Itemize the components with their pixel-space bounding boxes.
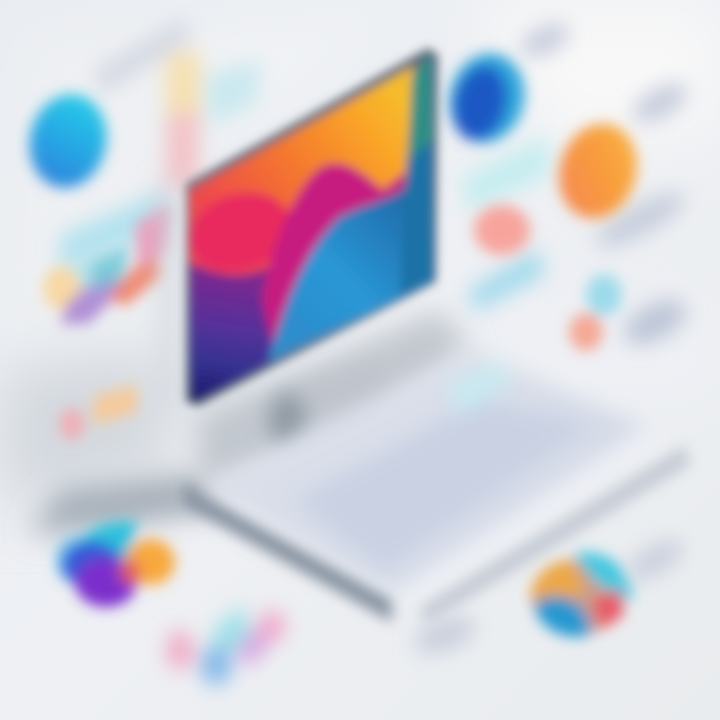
chart: small round icons right [569, 274, 622, 351]
panel: lower right cards [409, 532, 690, 661]
icon: blue circle left [21, 87, 115, 195]
icon: orange circle [548, 114, 648, 228]
screen: purple area [190, 262, 300, 402]
chart: right peach shape [474, 205, 530, 255]
chart: left small bars [60, 384, 137, 440]
floor shadow under monitor [30, 180, 470, 535]
icon: monitor with colourful screen [179, 48, 438, 406]
icon: deep blue circle [440, 45, 534, 151]
icon: laptop keyboard base [200, 350, 665, 603]
chart: right pie chart [530, 552, 632, 637]
icon: keyboard front edge [184, 445, 690, 625]
screen: orange area [190, 66, 414, 290]
chart: bottom centre pastel bars [167, 605, 285, 685]
screen: red blob [179, 180, 301, 284]
panel: left floating cards [60, 18, 262, 275]
screen: magenta ridge [262, 163, 406, 355]
chart: left pie chart [56, 521, 175, 607]
chart: left colourful area chart [43, 203, 170, 324]
panel: right floating cards [462, 17, 693, 354]
background tonal shading [0, 0, 720, 510]
screen: right teal strip [400, 54, 434, 296]
screen: blue wave [268, 180, 432, 362]
icon: monitor stand [268, 360, 385, 450]
